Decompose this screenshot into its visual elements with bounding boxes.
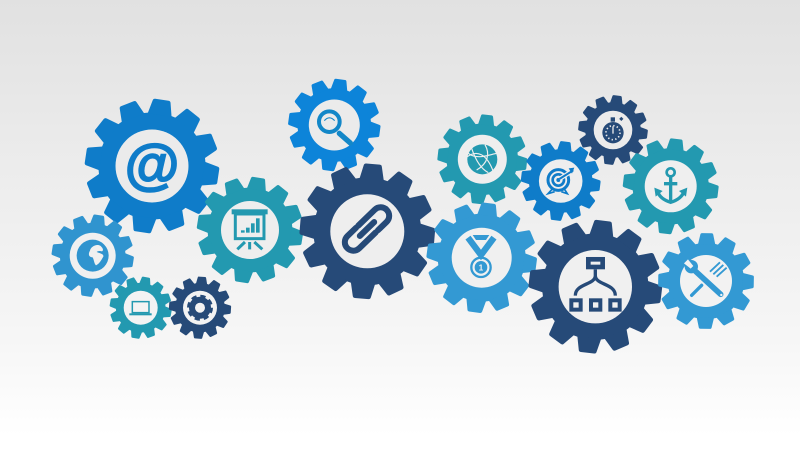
gear: network sphere xyxy=(433,110,532,209)
icon: magnifying glass xyxy=(319,111,350,143)
icon: globe xyxy=(77,240,109,272)
icon: network sphere xyxy=(467,144,497,174)
gear: presentation chart xyxy=(189,169,311,291)
icon: presentation board xyxy=(232,209,268,249)
icon: chain link xyxy=(341,204,393,254)
gear: medal xyxy=(420,196,543,319)
gear: globe xyxy=(46,209,139,302)
icon: wrench and screwdriver xyxy=(684,259,727,296)
gear: tools xyxy=(657,232,755,330)
gear: magnifier xyxy=(283,73,386,177)
icon: laptop xyxy=(129,302,152,315)
icon: stopwatch xyxy=(602,117,624,143)
gear: stopwatch xyxy=(574,91,652,169)
gear: laptop xyxy=(105,272,177,344)
icon: at sign: @ xyxy=(125,132,179,195)
gear: chain link xyxy=(294,158,440,304)
icon: anchor xyxy=(654,168,687,202)
gear: hierarchy xyxy=(521,213,669,361)
gear: anchor xyxy=(618,133,724,239)
gear: email at-sign xyxy=(76,90,228,242)
icon: medal: 1 xyxy=(479,262,484,272)
gear: target xyxy=(517,137,605,225)
icon: org chart xyxy=(571,259,620,310)
gear: settings xyxy=(167,275,233,341)
icon: target with arrow xyxy=(548,168,574,194)
icon: small cog xyxy=(188,296,212,319)
